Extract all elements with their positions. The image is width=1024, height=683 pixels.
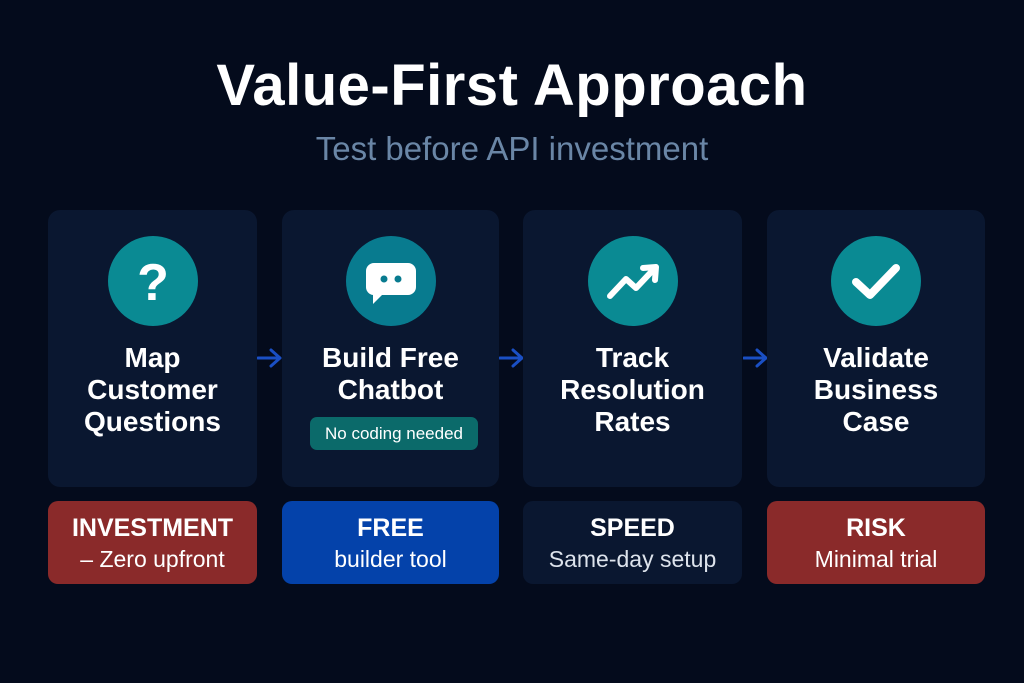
box: speed (523, 501, 742, 584)
step label: Rates (594, 406, 671, 437)
arrow (743, 348, 767, 368)
box: investment: INVESTMENT (72, 514, 233, 542)
step label: Chatbot (338, 374, 443, 405)
tag: no coding needed: No coding needed (325, 424, 463, 443)
box: investment: – Zero upfront (80, 546, 225, 572)
step label (814, 342, 938, 437)
step label: Business (814, 374, 938, 405)
icon: trend line (588, 236, 678, 326)
step label (560, 342, 705, 437)
step label: Map (124, 342, 180, 373)
arrow (499, 348, 523, 368)
icon: check (831, 236, 921, 326)
box: speed: Same-day setup (549, 546, 716, 572)
step label: Case (843, 406, 909, 437)
box: free: builder tool (334, 546, 447, 572)
step label: Track (596, 342, 669, 373)
arrow (257, 348, 282, 368)
step label: Questions (84, 406, 221, 437)
step label (322, 342, 459, 405)
box: investment (48, 501, 257, 584)
box: free: FREE (357, 514, 424, 542)
panel: validate business case (767, 210, 985, 487)
box: risk (767, 501, 985, 584)
subtitle: Test before API investment (316, 130, 708, 167)
tag: no coding needed (310, 417, 478, 450)
icon: chat bubble (346, 236, 436, 326)
icon: question mark (108, 236, 198, 326)
step label: Build Free (322, 342, 459, 373)
panel: build free chatbot (282, 210, 499, 487)
title: Value-First Approach (216, 53, 808, 118)
box: risk: RISK (846, 514, 906, 542)
step label: Customer (87, 374, 218, 405)
step label: Validate (823, 342, 929, 373)
panel: map customer questions (48, 210, 257, 487)
icon: question mark: ? (137, 254, 168, 312)
step label: Resolution (560, 374, 705, 405)
box: free (282, 501, 499, 584)
box: risk: Minimal trial (815, 546, 937, 572)
box: speed: SPEED (590, 514, 675, 542)
step label (84, 342, 221, 437)
panel: track resolution rates (523, 210, 742, 487)
